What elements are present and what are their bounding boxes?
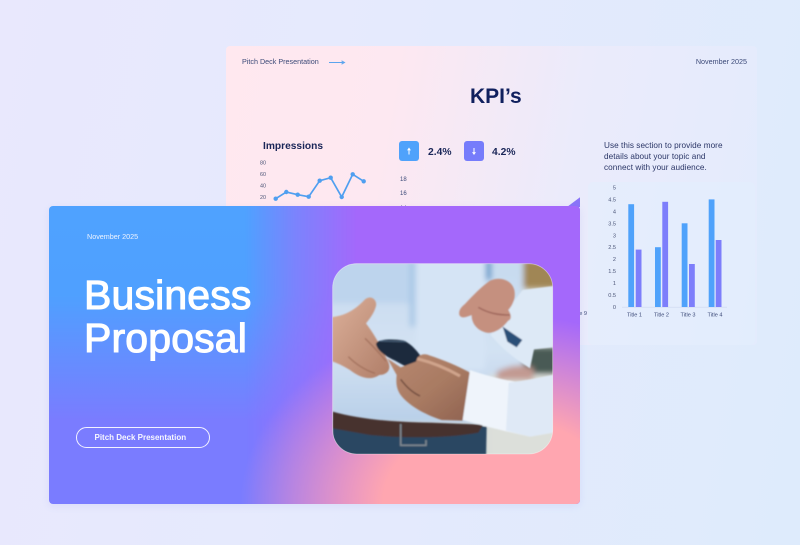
bar chart: 3.5 (608, 221, 616, 227)
text block: section description (604, 141, 723, 172)
photo: hands holding a phone (332, 263, 554, 454)
panel: Business Proposal cover slide (49, 206, 580, 504)
panel: bar chart card (588, 182, 755, 345)
header date: November 2025 (696, 57, 747, 66)
line chart: impressions: 40 (260, 184, 266, 190)
partial axis labels: 16 (400, 191, 407, 197)
line chart: impressions (260, 160, 366, 201)
left hand (330, 297, 389, 378)
belt (333, 412, 483, 437)
partial axis labels: 14 (400, 206, 407, 212)
bar chart: Title 4 (707, 312, 723, 318)
title (84, 272, 252, 361)
white cuff and sleeve (462, 370, 514, 432)
stat: 4.2%: 4.2% (492, 147, 515, 158)
bar chart: 2.5 (608, 245, 616, 251)
heading: Impressions: Impressions (263, 141, 323, 152)
heading: KPI's: KPI’s (470, 85, 522, 108)
panel: KPI slide (back) (226, 46, 757, 345)
header label: Pitch Deck Presentation (242, 57, 319, 66)
icon: header arrow (329, 60, 346, 65)
bar chart: Title 1 (627, 312, 642, 318)
icon: folded corner tab (568, 197, 580, 207)
partial axis labels: 18 (400, 176, 407, 182)
bar chart: 4.5 (608, 197, 616, 203)
line chart: impressions: 60 (260, 172, 266, 178)
line chart: impressions: 20 (260, 195, 266, 201)
text block: section description: Use this section to provide more (604, 141, 723, 150)
title: Proposal (84, 315, 247, 361)
title: Business (84, 272, 252, 318)
pill label (76, 427, 210, 448)
stat: 2.4%: 2.4% (428, 147, 451, 158)
bar chart: 4 (613, 209, 616, 215)
gradient overlay: purple (256, 206, 580, 504)
holding hand (387, 354, 470, 421)
cover date: November 2025 (87, 232, 138, 241)
line chart: impressions: 80 (260, 160, 266, 166)
bar chart: 2 (613, 257, 616, 263)
phone (375, 338, 421, 367)
icon: down badge (464, 141, 484, 161)
bar chart: 3 (613, 233, 616, 239)
bar chart: 5 (613, 185, 616, 191)
icon: up badge (399, 141, 419, 161)
text block: section description: connect with your audience. (604, 163, 707, 172)
bar chart: 1 (613, 281, 616, 287)
jeans (333, 420, 487, 460)
partial axis labels (400, 176, 407, 212)
far-right sleeve (491, 286, 553, 368)
bar chart: Title 3 (680, 312, 696, 318)
pill label: Pitch Deck Presentation (94, 433, 186, 442)
partial axis label: Title 9: Title 9 (572, 311, 587, 317)
bar chart: 0 (613, 305, 616, 311)
text block: section description: details about your topic and (604, 152, 706, 161)
pointing hand (459, 279, 515, 333)
bar chart: 0.5 (608, 293, 616, 299)
bar chart (608, 185, 727, 318)
bar chart: 1.5 (608, 269, 616, 275)
gradient overlay: pink (49, 206, 580, 504)
bar chart: Title 2 (654, 312, 669, 318)
